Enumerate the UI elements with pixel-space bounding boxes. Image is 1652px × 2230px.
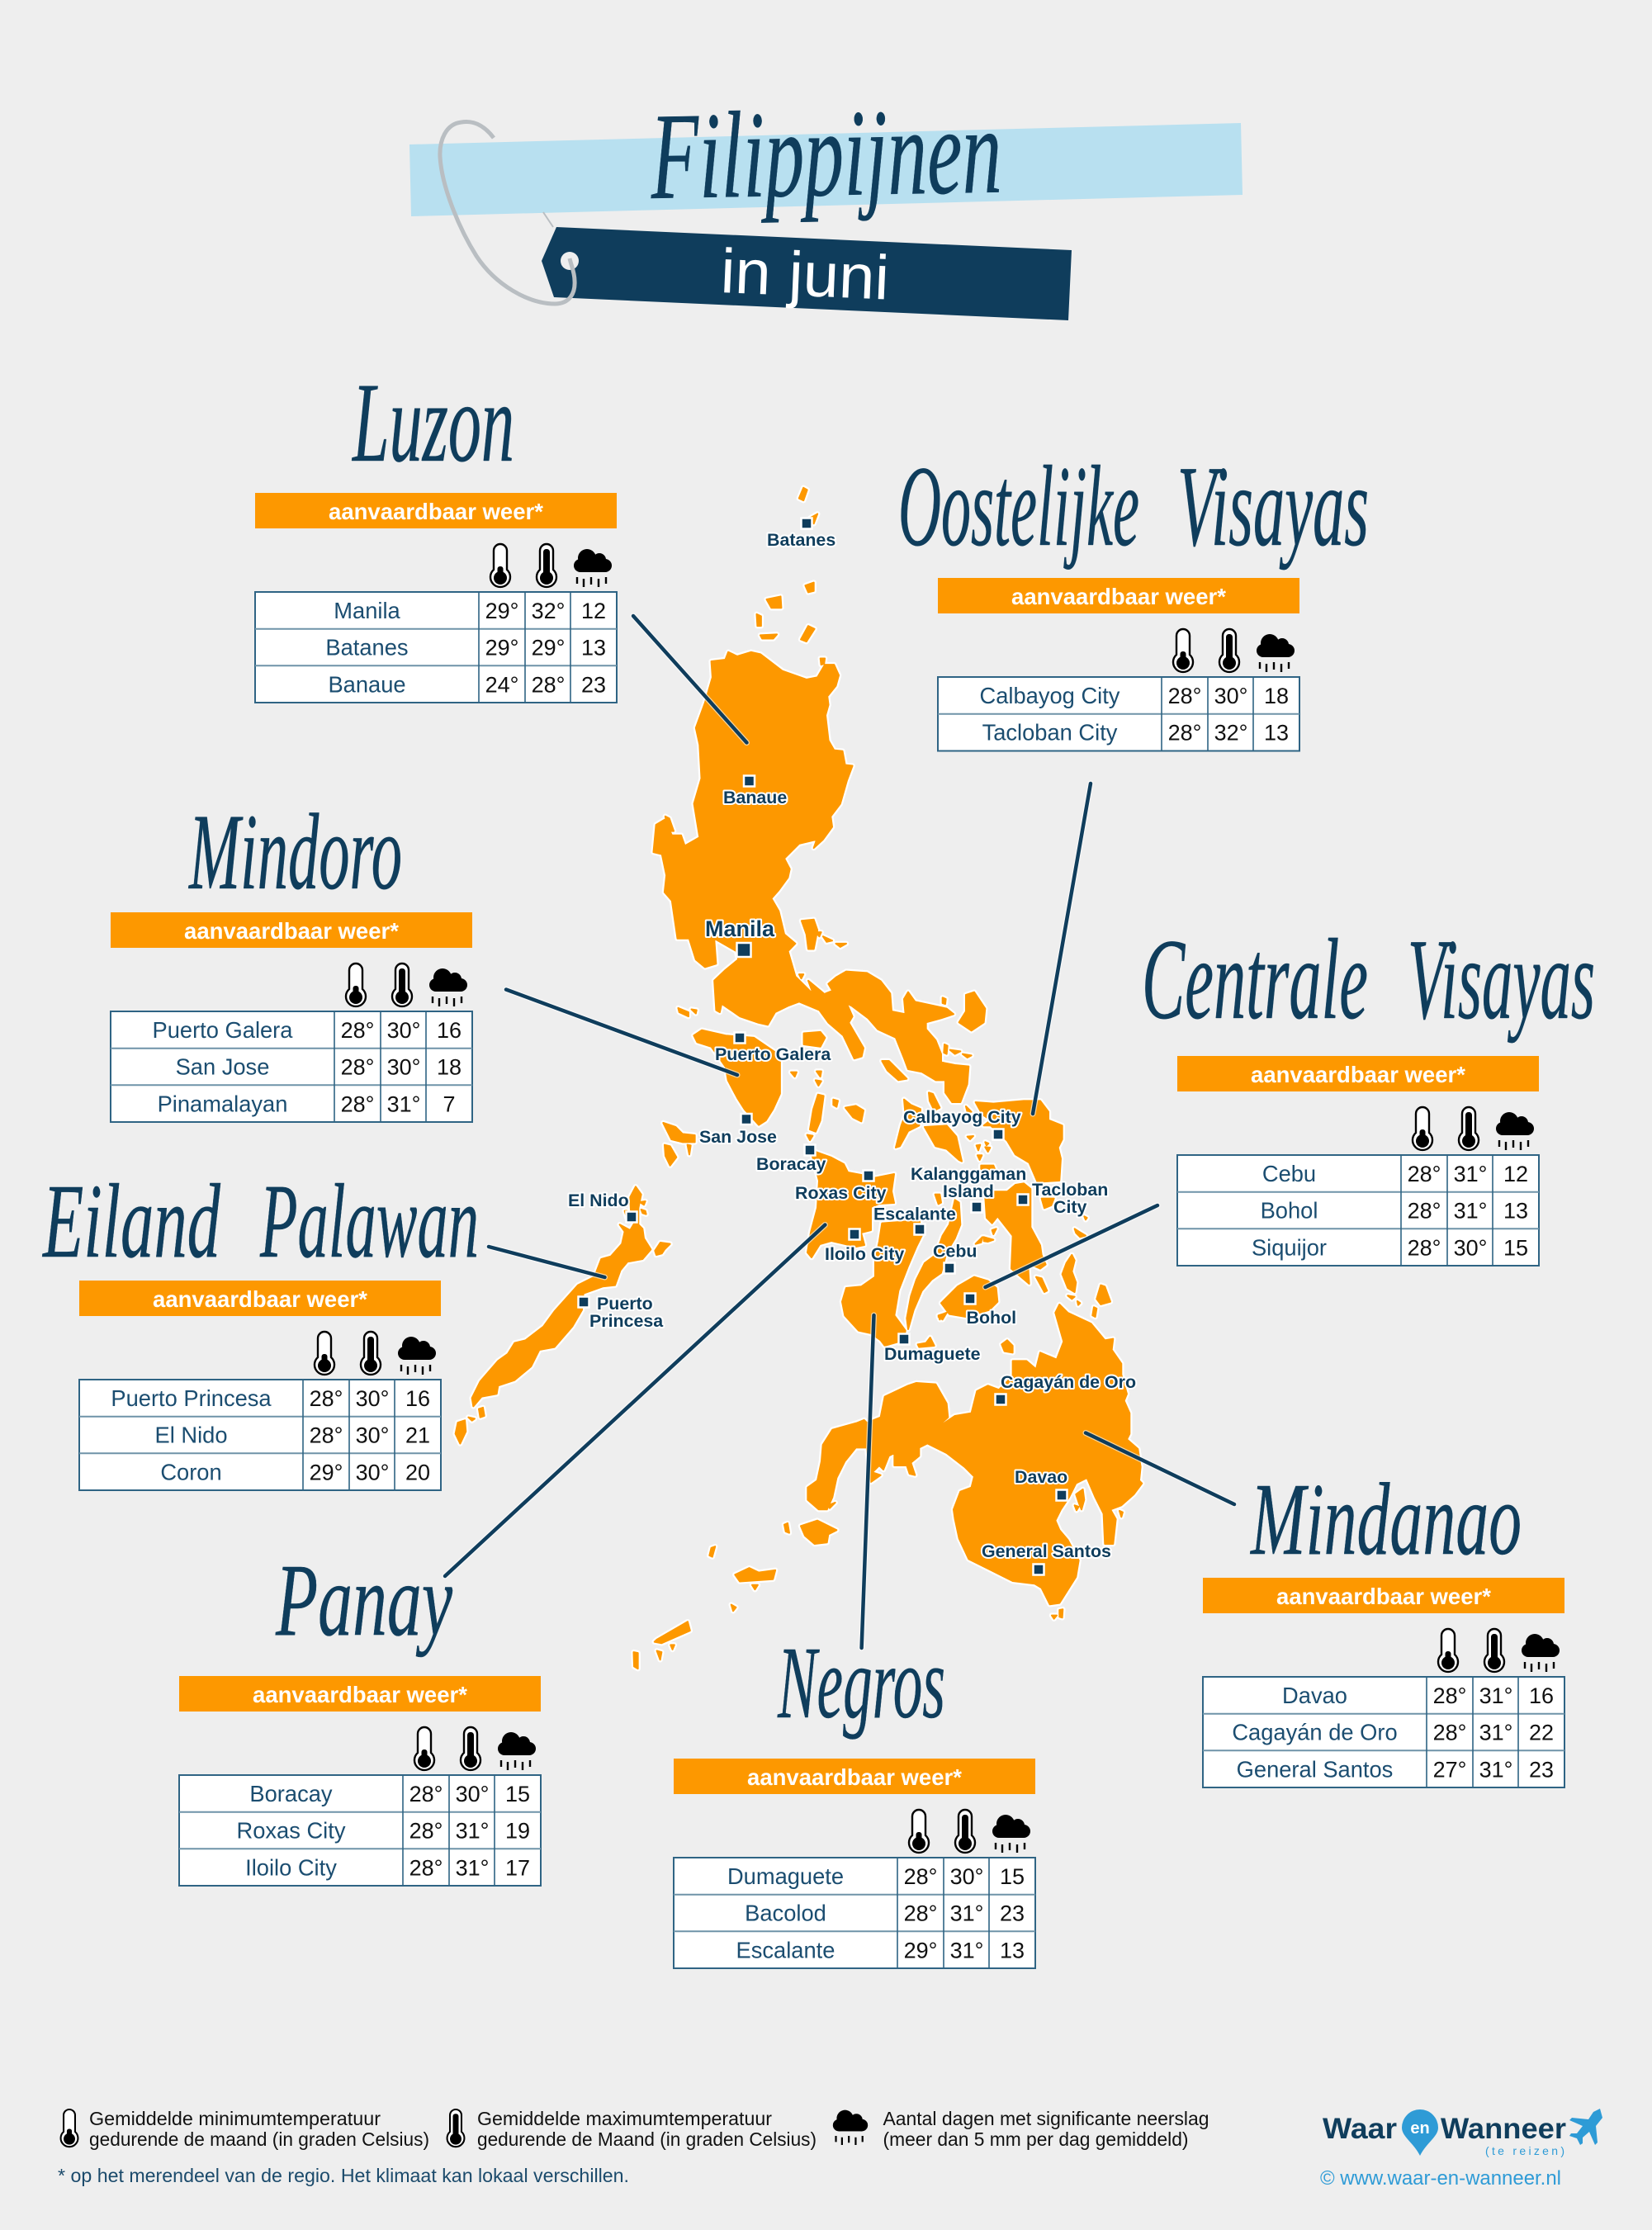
weather table: Mindanao: 16 — [1529, 1683, 1554, 1708]
weather table: Mindoro: 16 — [437, 1018, 462, 1043]
weather table: Centrale Visayas: 15 — [1503, 1235, 1528, 1260]
city: Manila: Manila — [705, 916, 775, 941]
weather table: Negros: Dumaguete — [727, 1863, 844, 1889]
city: San Jose — [699, 1114, 777, 1147]
city: General Santos — [982, 1541, 1111, 1575]
weather table: Eiland Palawan: Puerto Princesa — [111, 1385, 272, 1411]
panel: Oostelijke Visayas — [898, 443, 1369, 751]
city: Cagayán de Oro — [996, 1372, 1136, 1405]
weather table: Panay: 15 — [505, 1782, 530, 1806]
weather table: Mindanao: aanvaardbaar weer* — [1276, 1584, 1491, 1609]
legend: rain days: (meer dan 5 mm per dag gemiddeld) — [883, 2128, 1189, 2150]
weather table: Eiland Palawan: 21 — [405, 1423, 430, 1448]
weather table: Luzon: 29° — [532, 636, 565, 660]
city: Iloilo City: Iloilo City — [825, 1244, 904, 1264]
weather table: Luzon: 13 — [581, 636, 606, 660]
weather table: Panay: 28° — [409, 1782, 443, 1806]
weather table: Centrale Visayas: Siquijor — [1252, 1234, 1327, 1260]
weather table: Eiland Palawan: 20 — [405, 1460, 430, 1484]
callout line: Mindanao — [1086, 1433, 1234, 1504]
weather table: Eiland Palawan: El Nido — [155, 1423, 228, 1448]
weather table: Negros: Bacolod — [745, 1901, 826, 1926]
legend — [61, 2108, 1209, 2150]
city: Puerto Galera — [715, 1032, 831, 1064]
city: Tacloban City: Tacloban — [1032, 1180, 1108, 1200]
weather table: Luzon: Manila — [334, 598, 401, 623]
weather table: Oostelijke Visayas: aanvaardbaar weer* — [1011, 584, 1226, 609]
weather table: Oostelijke Visayas: 13 — [1264, 721, 1289, 746]
panel: Panay — [179, 1544, 541, 1886]
city: El Nido — [568, 1191, 637, 1222]
map of the Philippines — [456, 488, 1142, 1669]
weather table: Mindanao: 28° — [1433, 1683, 1466, 1708]
weather table: Oostelijke Visayas: 28° — [1168, 721, 1201, 746]
heading: Panay: Panay — [275, 1544, 452, 1658]
weather table: Mindanao: Davao — [1282, 1683, 1347, 1708]
weather table: Panay: Iloilo City — [245, 1854, 337, 1880]
weather table: Eiland Palawan: 30° — [356, 1423, 389, 1448]
city: Puerto Princesa: Puerto — [597, 1294, 653, 1314]
weather table: Panay: Boracay — [249, 1781, 333, 1806]
weather table: Mindoro: aanvaardbaar weer* — [184, 918, 399, 944]
panel: Mindanao — [1203, 1463, 1564, 1787]
city: Dumaguete: Dumaguete — [884, 1344, 981, 1364]
heading: Oostelijke Visayas: Oostelijke — [898, 443, 1139, 571]
weather table: Luzon: 29° — [485, 636, 518, 660]
weather table: Negros: aanvaardbaar weer* — [747, 1764, 962, 1790]
weather table: Negros: 28° — [904, 1864, 937, 1889]
weather table: Centrale Visayas: 31° — [1454, 1199, 1487, 1224]
weather table: Panay: 28° — [409, 1855, 443, 1880]
weather table: Eiland Palawan: 16 — [405, 1386, 430, 1411]
panel: Negros — [674, 1626, 1035, 1968]
city: Roxas City: Roxas City — [795, 1183, 887, 1203]
city: Dumaguete — [884, 1334, 981, 1364]
title band — [409, 123, 1243, 216]
weather table: Centrale Visayas: 28° — [1408, 1235, 1441, 1260]
city: Cebu — [933, 1242, 977, 1273]
heading: Eiland Palawan: Eiland — [42, 1162, 221, 1280]
logo: Waar en Wanneer: Wanneer — [1441, 2113, 1566, 2145]
panel: Mindoro — [111, 791, 472, 1122]
weather table: Oostelijke Visayas: 32° — [1214, 721, 1247, 746]
weather table: Negros: 30° — [950, 1864, 983, 1889]
weather table: Panay: 30° — [456, 1782, 489, 1806]
weather table: Negros: 31° — [950, 1938, 983, 1962]
weather table: Mindanao: General Santos — [1237, 1756, 1393, 1782]
city: Kalanggaman Island: Island — [943, 1181, 994, 1201]
weather table: Luzon — [255, 493, 617, 703]
weather table: Mindoro: 28° — [341, 1018, 374, 1043]
weather table: Negros: 23 — [1000, 1901, 1025, 1926]
weather table: Negros: Escalante — [736, 1937, 835, 1962]
weather table: Eiland Palawan — [79, 1281, 441, 1490]
luggage tag — [542, 227, 1072, 320]
weather table: Negros: 29° — [904, 1938, 937, 1962]
tag string — [543, 212, 553, 227]
weather table: Eiland Palawan: 30° — [356, 1460, 389, 1484]
city: Escalante: Escalante — [873, 1204, 956, 1224]
weather table: Centrale Visayas: 30° — [1454, 1235, 1487, 1260]
weather table: Oostelijke Visayas — [938, 578, 1299, 751]
weather table: Oostelijke Visayas: Tacloban City — [982, 720, 1118, 746]
weather table: Mindoro: 31° — [387, 1091, 420, 1116]
city: Batanes: Batanes — [767, 530, 835, 550]
city: Bohol — [964, 1293, 1016, 1328]
weather table: Luzon: 23 — [581, 672, 606, 697]
weather table: Mindanao: 31° — [1479, 1757, 1512, 1782]
city: Iloilo City — [825, 1229, 904, 1264]
map markers and city labels — [568, 518, 1136, 1575]
weather table: Luzon: aanvaardbaar weer* — [329, 499, 543, 524]
callout line: Centrale Visayas — [986, 1205, 1157, 1287]
weather table: Mindoro: 28° — [341, 1091, 374, 1116]
legend: maximum temperature: gedurende de Maand (in graden Celsius) — [477, 2128, 817, 2150]
weather table: Mindoro: Puerto Galera — [153, 1017, 293, 1043]
weather table: Centrale Visayas: 12 — [1503, 1162, 1528, 1186]
logo pin icon — [1402, 2109, 1438, 2156]
weather table: Panay — [179, 1676, 541, 1886]
city: Cebu: Cebu — [933, 1242, 977, 1262]
weather table: Luzon: 32° — [532, 599, 565, 623]
legend: minimum temperature: gedurende de maand (in graden Celsius) — [89, 2128, 429, 2150]
weather table: Mindoro: 28° — [341, 1055, 374, 1080]
logo: Waar en Wanneer: Waar — [1323, 2113, 1397, 2145]
heading: Eiland Palawan: Palawan — [259, 1162, 479, 1280]
weather table: Luzon: Batanes — [325, 635, 409, 660]
city: Puerto Princesa: Princesa — [589, 1311, 664, 1331]
callout line: Oostelijke Visayas — [1033, 784, 1091, 1114]
city: Kalanggaman Island: Kalanggaman — [911, 1164, 1026, 1184]
heading: Centrale Visayas: Centrale — [1142, 916, 1368, 1044]
city: El Nido: El Nido — [568, 1191, 629, 1210]
weather table: Centrale Visayas: 28° — [1408, 1199, 1441, 1224]
weather table: Mindoro: 18 — [437, 1055, 462, 1080]
weather table: Centrale Visayas: Cebu — [1262, 1161, 1316, 1186]
weather table: Negros — [674, 1759, 1035, 1968]
city: Banaue: Banaue — [723, 788, 787, 807]
city: Batanes — [767, 518, 835, 550]
panel: Centrale Visayas — [1142, 916, 1595, 1266]
legend: rain days — [833, 2108, 1209, 2150]
weather table: Eiland Palawan: Coron — [160, 1459, 222, 1484]
weather table: Centrale Visayas — [1177, 1056, 1539, 1266]
weather table: Panay: 31° — [456, 1819, 489, 1844]
tag hole — [561, 252, 579, 270]
weather table: Oostelijke Visayas: 28° — [1168, 684, 1201, 708]
tag ring — [440, 122, 575, 304]
callout line: Luzon — [633, 616, 746, 743]
weather table: Mindanao: 31° — [1479, 1721, 1512, 1745]
weather table: Negros: 28° — [904, 1901, 937, 1926]
heading: Mindoro: Mindoro — [188, 791, 402, 912]
city: Puerto Galera: Puerto Galera — [715, 1044, 831, 1064]
weather table: Eiland Palawan: 28° — [310, 1386, 343, 1411]
weather table: Panay: 31° — [456, 1855, 489, 1880]
city: Manila — [705, 916, 775, 957]
heading: Eiland Palawan — [42, 1162, 479, 1280]
city: Davao: Davao — [1015, 1467, 1067, 1487]
weather table: Panay: 28° — [409, 1819, 443, 1844]
legend: maximum temperature — [447, 2108, 817, 2150]
logo: Waar en Wanneer: (te reizen) — [1485, 2144, 1564, 2157]
weather table: Eiland Palawan: aanvaardbaar weer* — [153, 1286, 367, 1312]
panel: Eiland Palawan — [42, 1162, 479, 1490]
city: General Santos: General Santos — [982, 1541, 1111, 1561]
logo plane icon — [1569, 2109, 1602, 2145]
weather table: Mindanao: 27° — [1433, 1757, 1466, 1782]
weather table: Panay: 19 — [505, 1819, 530, 1844]
weather table: Oostelijke Visayas: Calbayog City — [980, 683, 1120, 708]
weather table: Eiland Palawan: 30° — [356, 1386, 389, 1411]
weather table: Eiland Palawan: 28° — [310, 1423, 343, 1448]
weather table: Negros: 13 — [1000, 1938, 1025, 1962]
title text: Filippijnen — [649, 83, 1003, 225]
logo: Waar en Wanneer: en — [1410, 2119, 1430, 2138]
weather table: Mindoro: 7 — [443, 1091, 456, 1116]
weather table: Mindanao: 28° — [1433, 1721, 1466, 1745]
legend: minimum temperature — [61, 2108, 429, 2150]
heading: Negros: Negros — [777, 1626, 945, 1740]
city: Davao — [1015, 1467, 1067, 1501]
weather table: Luzon: Banaue — [328, 671, 406, 697]
city: Tacloban City — [1017, 1180, 1108, 1217]
city: Boracay: Boracay — [756, 1154, 826, 1174]
weather table: Mindanao: 22 — [1529, 1721, 1554, 1745]
weather table: Luzon: 29° — [485, 599, 518, 623]
weather table: Mindoro: 30° — [387, 1018, 420, 1043]
weather table: Mindoro — [111, 912, 472, 1122]
weather table: Centrale Visayas: 28° — [1408, 1162, 1441, 1186]
callout line: Panay — [445, 1225, 825, 1576]
city: Tacloban City: City — [1053, 1197, 1087, 1217]
weather table: Panay: aanvaardbaar weer* — [253, 1682, 467, 1707]
subtitle text: in juni — [719, 236, 891, 314]
weather table: Negros: 15 — [1000, 1864, 1025, 1889]
weather table: Centrale Visayas: Bohol — [1261, 1198, 1318, 1224]
callout line: Negros — [862, 1315, 873, 1648]
weather table: Oostelijke Visayas: 18 — [1264, 684, 1289, 708]
weather table: Panay: Roxas City — [237, 1818, 346, 1844]
weather table: Luzon: 28° — [532, 672, 565, 697]
weather table: Mindanao: Cagayán de Oro — [1232, 1720, 1398, 1745]
city: Calbayog City — [903, 1107, 1021, 1139]
heading: Luzon: Luzon — [352, 359, 514, 485]
legend: maximum temperature: Gemiddelde maximumtemperatuur — [477, 2108, 772, 2129]
heading: Oostelijke Visayas: Visayas — [1177, 443, 1369, 571]
city: Escalante — [873, 1204, 956, 1235]
weather table: Panay: 17 — [505, 1855, 530, 1880]
weather table: Mindanao: 23 — [1529, 1757, 1554, 1782]
weather table: Luzon: 24° — [485, 672, 518, 697]
callout line: Eiland Palawan — [489, 1247, 604, 1277]
weather table: Luzon: 12 — [581, 599, 606, 623]
legend: minimum temperature: Gemiddelde minimumtemperatuur — [89, 2108, 381, 2129]
city: Boracay — [756, 1144, 826, 1174]
title block — [409, 83, 1243, 320]
weather table: Centrale Visayas: aanvaardbaar weer* — [1251, 1062, 1465, 1087]
city: Kalanggaman Island — [911, 1164, 1026, 1212]
website credit: © www.waar-en-wanneer.nl — [1320, 2167, 1561, 2190]
weather table: Mindoro: San Jose — [176, 1054, 269, 1080]
city: Puerto Princesa — [578, 1294, 664, 1331]
weather table: Centrale Visayas: 13 — [1503, 1199, 1528, 1224]
weather table: Eiland Palawan: 29° — [310, 1460, 343, 1484]
weather table: Centrale Visayas: 31° — [1454, 1162, 1487, 1186]
city: Bohol: Bohol — [966, 1308, 1016, 1328]
city: San Jose: San Jose — [699, 1127, 777, 1147]
legend: rain days: Aantal dagen met significante neerslag — [883, 2108, 1209, 2129]
city: Roxas City — [795, 1171, 887, 1203]
city: Cagayán de Oro: Cagayán de Oro — [1001, 1372, 1136, 1392]
weather table: Oostelijke Visayas: 30° — [1214, 684, 1247, 708]
city: Banaue — [723, 776, 787, 807]
weather table: Mindanao: 31° — [1479, 1683, 1512, 1708]
city: Calbayog City: Calbayog City — [903, 1107, 1021, 1127]
logo: Waar en Wanneer — [1323, 2109, 1602, 2157]
callout line: Mindoro — [506, 989, 737, 1075]
footnote: * op het merendeel van de regio. Het klimaat kan lokaal verschillen. — [58, 2165, 629, 2186]
panel: Luzon — [255, 359, 617, 703]
weather table: Mindanao — [1203, 1578, 1564, 1787]
weather table: Negros: 31° — [950, 1901, 983, 1926]
weather table: Mindoro: Pinamalayan — [158, 1091, 287, 1116]
weather table: Mindoro: 30° — [387, 1055, 420, 1080]
